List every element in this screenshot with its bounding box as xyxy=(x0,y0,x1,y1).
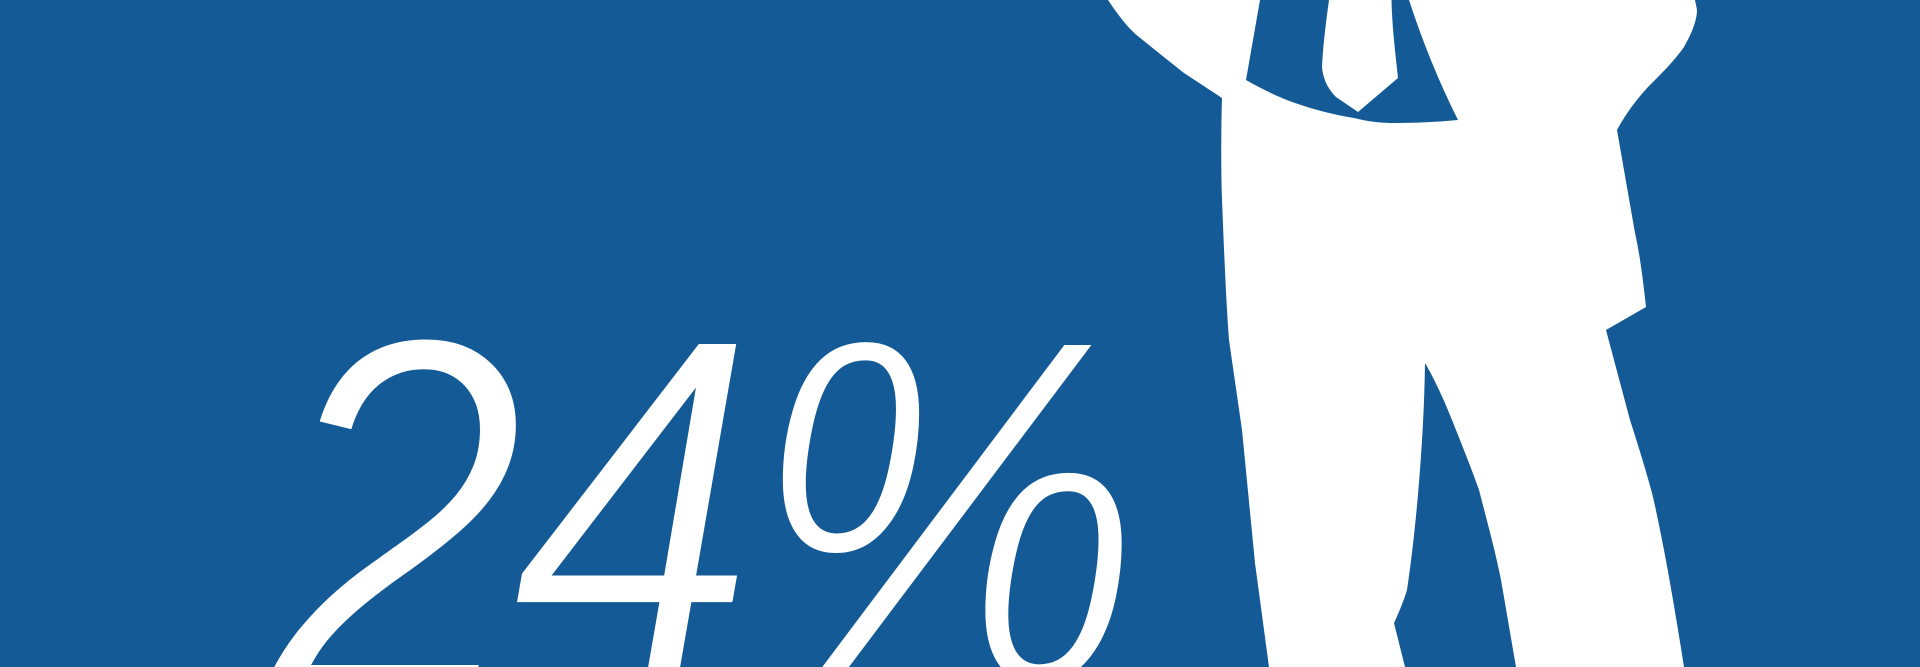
icon: businessman silhouette xyxy=(1108,0,1697,667)
necktie xyxy=(1322,0,1398,112)
shirt opening cutout xyxy=(1246,0,1458,123)
statistic: 24% xyxy=(260,227,1144,667)
